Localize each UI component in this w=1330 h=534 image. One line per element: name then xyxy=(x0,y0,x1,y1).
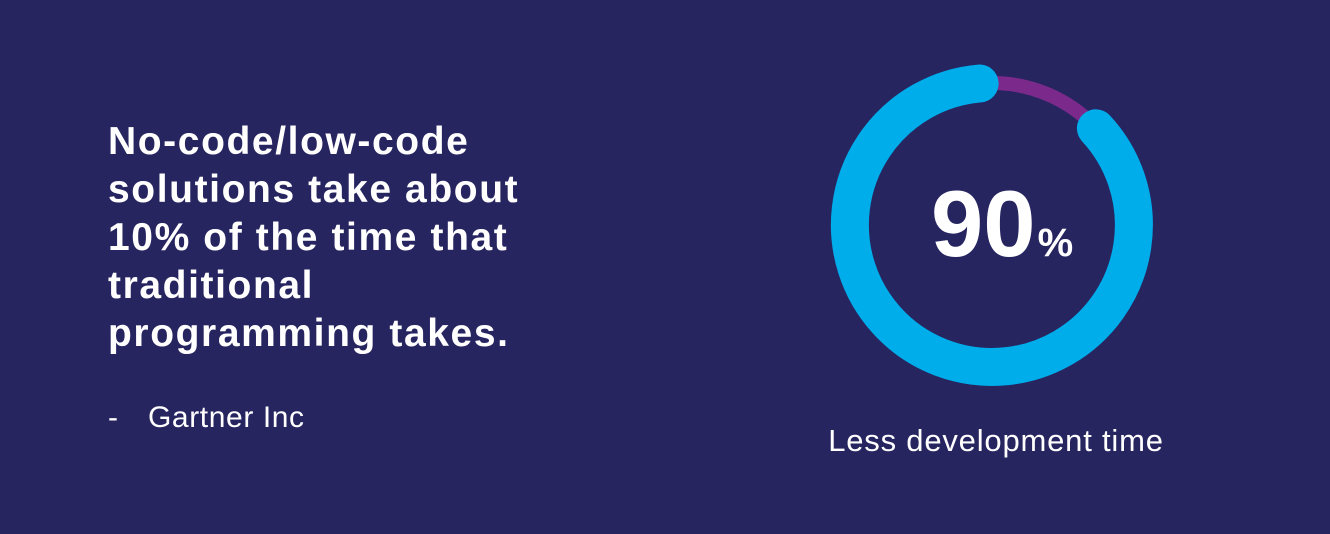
quote text: traditional xyxy=(108,264,314,307)
blue arc xyxy=(850,84,1134,367)
quote text: 10% of the time that xyxy=(108,216,508,259)
source attribution xyxy=(108,401,305,434)
chart label: Less development time xyxy=(828,423,1164,458)
purple segment xyxy=(992,83,1096,128)
quote text: solutions take about xyxy=(108,168,519,211)
quote text: programming takes. xyxy=(108,312,510,355)
value 90%: 90% xyxy=(931,171,1073,276)
source attribution: - xyxy=(108,401,119,434)
quote text: No-code/low-code xyxy=(108,120,469,163)
quote text xyxy=(108,120,519,355)
text: Gartner Inc xyxy=(148,401,305,434)
